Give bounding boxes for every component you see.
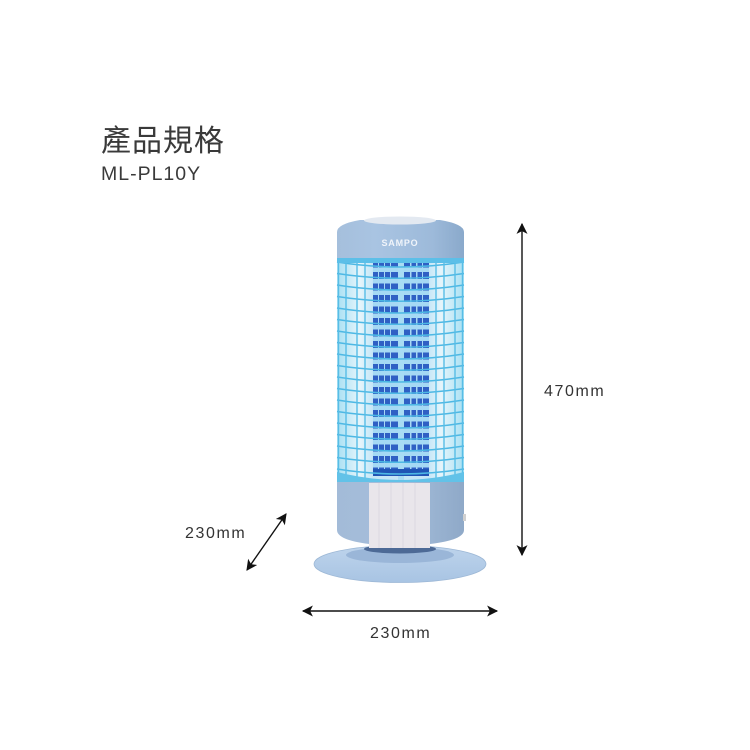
top cap [337, 216, 464, 258]
title: 產品規格 [101, 125, 225, 158]
foot base [314, 544, 486, 582]
cage pillars [338, 258, 462, 480]
height arrow [521, 224, 523, 555]
depth label: 230mm [185, 525, 246, 542]
height label: 470mm [544, 383, 605, 400]
light cage [337, 256, 464, 482]
width arrow [303, 610, 497, 612]
cage ribs [337, 262, 464, 474]
switch nub [463, 514, 466, 521]
depth arrow [247, 514, 286, 570]
brand logo: SAMPO [381, 238, 419, 248]
lower body [337, 478, 464, 544]
product: bug zapper lamp [314, 216, 486, 582]
model number: ML-PL10Y [101, 163, 201, 185]
white control panel [369, 483, 430, 548]
blue tube [373, 258, 429, 476]
width label: 230mm [370, 625, 431, 642]
